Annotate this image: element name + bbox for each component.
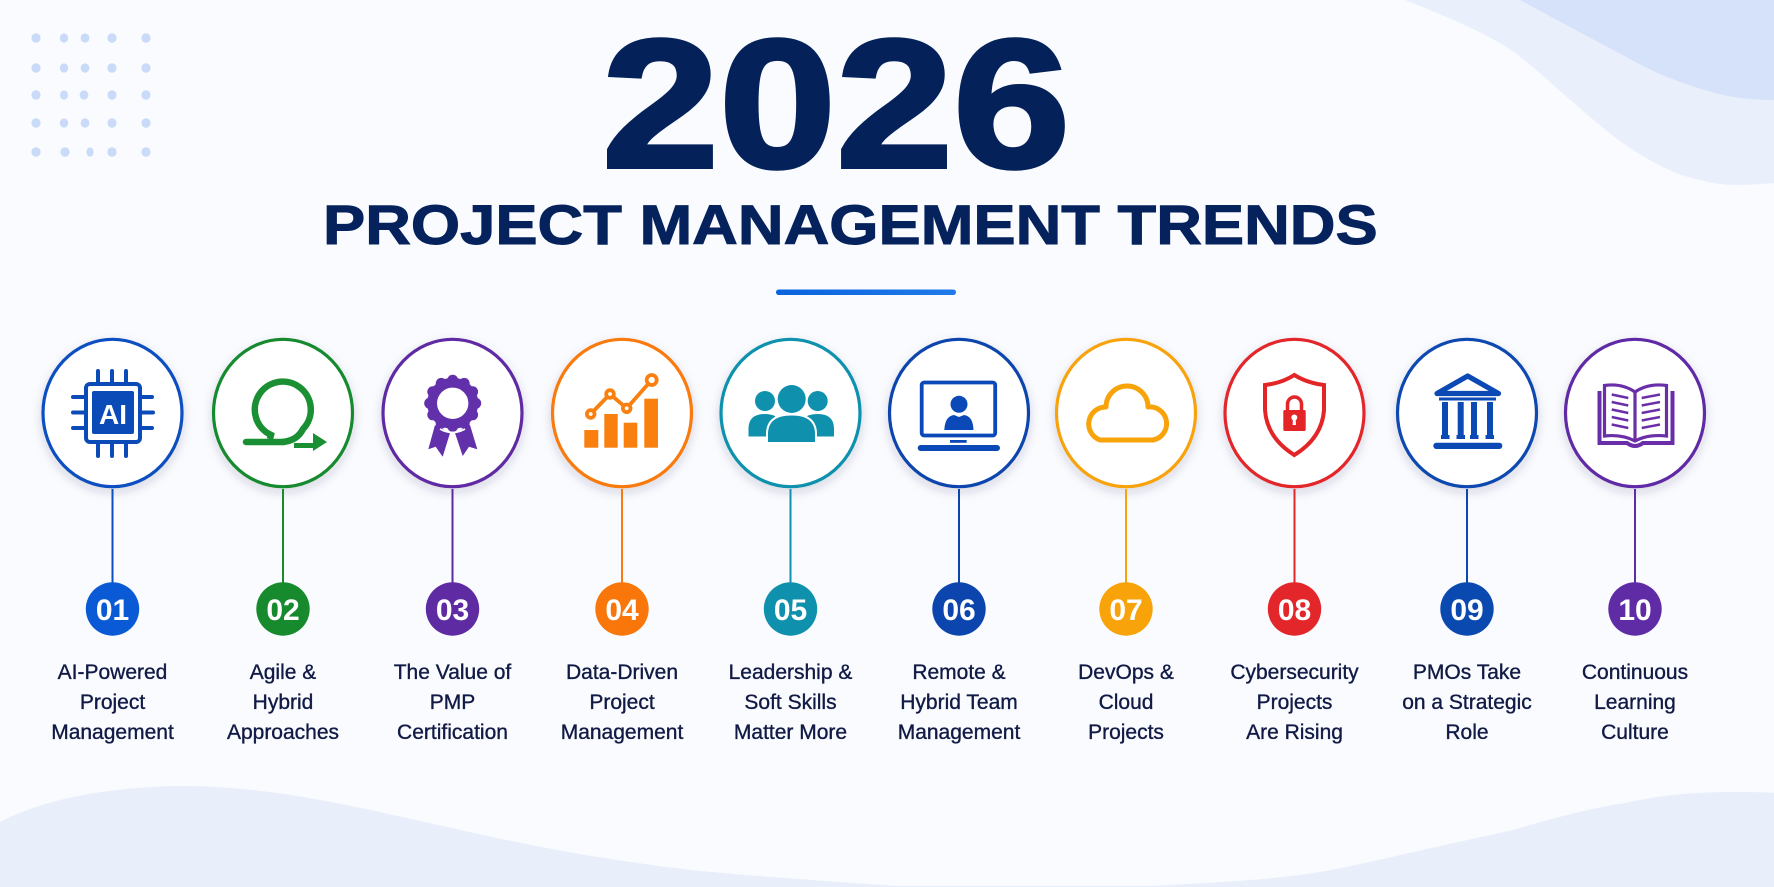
label 02 — [227, 661, 339, 744]
badge 03: 03 — [436, 594, 469, 627]
trend 03: The Value of PMP Certification — [383, 339, 522, 744]
label 04 — [561, 661, 683, 744]
icon: security shield with lock — [1265, 375, 1324, 455]
icon: institution columns — [1433, 376, 1502, 449]
label 03: Certification — [397, 721, 508, 744]
label 05: Matter More — [734, 721, 847, 744]
bottom wave — [0, 786, 1774, 887]
trend 08: Cybersecurity Projects Are Rising — [1225, 339, 1364, 744]
badge 06 — [932, 582, 986, 636]
badge 07: 07 — [1109, 594, 1143, 627]
connector 06 — [958, 489, 960, 583]
label 08: Cybersecurity — [1230, 661, 1359, 684]
ring 03 — [383, 339, 522, 487]
title: subtitle: PROJECT MANAGEMENT TRENDS — [323, 193, 1378, 256]
ring 05 — [721, 339, 860, 487]
label 03: PMP — [430, 691, 475, 714]
label 10: Culture — [1601, 721, 1669, 744]
label 03: The Value of — [394, 661, 511, 684]
label 05 — [729, 661, 852, 744]
badge 08 — [1268, 582, 1321, 636]
icon: AI chip — [73, 371, 153, 456]
badge 10: 10 — [1618, 594, 1652, 627]
connector 07 — [1125, 489, 1127, 583]
connector 03 — [452, 489, 454, 583]
ring 04 — [552, 339, 692, 487]
badge 02: 02 — [266, 594, 300, 627]
badge 09: 09 — [1450, 594, 1484, 627]
connector 09 — [1466, 489, 1468, 583]
decorative dot grid — [31, 33, 151, 157]
badge 01: 01 — [96, 594, 129, 627]
label 07: Projects — [1088, 721, 1164, 744]
trend 05: Leadership & Soft Skills Matter More — [721, 339, 860, 744]
connector 08 — [1294, 489, 1296, 583]
top right wave: light — [1405, 0, 1774, 185]
label 02: Agile & — [250, 661, 316, 684]
connector 10 — [1634, 489, 1636, 583]
label 07: DevOps & — [1078, 661, 1174, 684]
icon: growth bar chart — [584, 375, 658, 448]
badge 02 — [256, 582, 310, 636]
icon: agile loop arrow — [246, 382, 327, 451]
label 08 — [1230, 661, 1359, 744]
label 08: Projects — [1257, 691, 1332, 714]
ring 08 — [1225, 339, 1364, 487]
label 06 — [898, 661, 1020, 744]
label 04: Data-Driven — [566, 661, 678, 684]
label 01 — [51, 661, 174, 744]
badge 10 — [1608, 582, 1662, 636]
badge 07 — [1099, 582, 1153, 636]
label 07 — [1078, 661, 1174, 744]
badge 01 — [86, 582, 139, 636]
trend 09: PMOs Take on a Strategic Role — [1398, 339, 1536, 744]
ring 09 — [1398, 339, 1536, 487]
trend 10: Continuous Learning Culture — [1566, 339, 1704, 744]
label 09: on a Strategic — [1402, 691, 1532, 714]
label 01: AI-Powered — [58, 661, 167, 684]
label 06: Remote & — [912, 661, 1006, 684]
label 03 — [394, 661, 511, 744]
label 04: Project — [589, 691, 655, 714]
badge 08: 08 — [1278, 594, 1311, 627]
label 01: Project — [80, 691, 145, 714]
badge 04: 04 — [605, 594, 639, 627]
trend 06: Remote & Hybrid Team Management — [890, 339, 1028, 744]
ring 07 — [1056, 339, 1196, 487]
connector 05 — [790, 489, 792, 583]
ring 01 — [43, 339, 182, 487]
trend 01: AI-Powered Project Management — [43, 339, 182, 744]
ring 10 — [1566, 339, 1704, 487]
label 02: Approaches — [227, 721, 339, 744]
label 10: Continuous — [1582, 661, 1688, 684]
icon: award ribbon — [424, 375, 481, 457]
title divider — [776, 290, 956, 295]
icon: cloud — [1089, 386, 1167, 440]
label 09: PMOs Take — [1413, 661, 1521, 684]
label 01: Management — [51, 721, 174, 744]
label 10: Learning — [1594, 691, 1676, 714]
badge 06: 06 — [942, 594, 976, 627]
label 04: Management — [561, 721, 683, 744]
icon: laptop video call — [918, 382, 1000, 451]
label 07: Cloud — [1099, 691, 1153, 714]
icon: team people — [748, 385, 834, 443]
badge 03 — [426, 582, 479, 636]
badge 09 — [1440, 582, 1494, 636]
connector 04 — [621, 489, 623, 583]
label 09 — [1402, 661, 1532, 744]
label 06: Management — [898, 721, 1020, 744]
icon: AI chip: AI — [99, 399, 127, 430]
label 02: Hybrid — [253, 691, 313, 714]
trend 04: Data-Driven Project Management — [552, 339, 692, 744]
trend 02: Agile & Hybrid Approaches — [214, 339, 352, 744]
badge 05: 05 — [774, 594, 807, 627]
label 08: Are Rising — [1246, 721, 1343, 744]
label 05: Leadership & — [729, 661, 852, 684]
connector 02 — [282, 489, 284, 583]
badge 04 — [595, 582, 649, 636]
label 09: Role — [1445, 721, 1489, 744]
ring 06 — [890, 339, 1028, 487]
trend 07: DevOps & Cloud Projects — [1056, 339, 1196, 744]
top right wave: darker — [1520, 0, 1774, 100]
connector 01 — [112, 489, 114, 583]
icon: open book — [1600, 385, 1672, 446]
ring 02 — [214, 339, 352, 487]
label 10 — [1582, 661, 1688, 744]
label 05: Soft Skills — [744, 691, 837, 714]
title: year: 2026 — [602, 1, 1070, 206]
label 06: Hybrid Team — [900, 691, 1018, 714]
badge 05 — [764, 582, 817, 636]
